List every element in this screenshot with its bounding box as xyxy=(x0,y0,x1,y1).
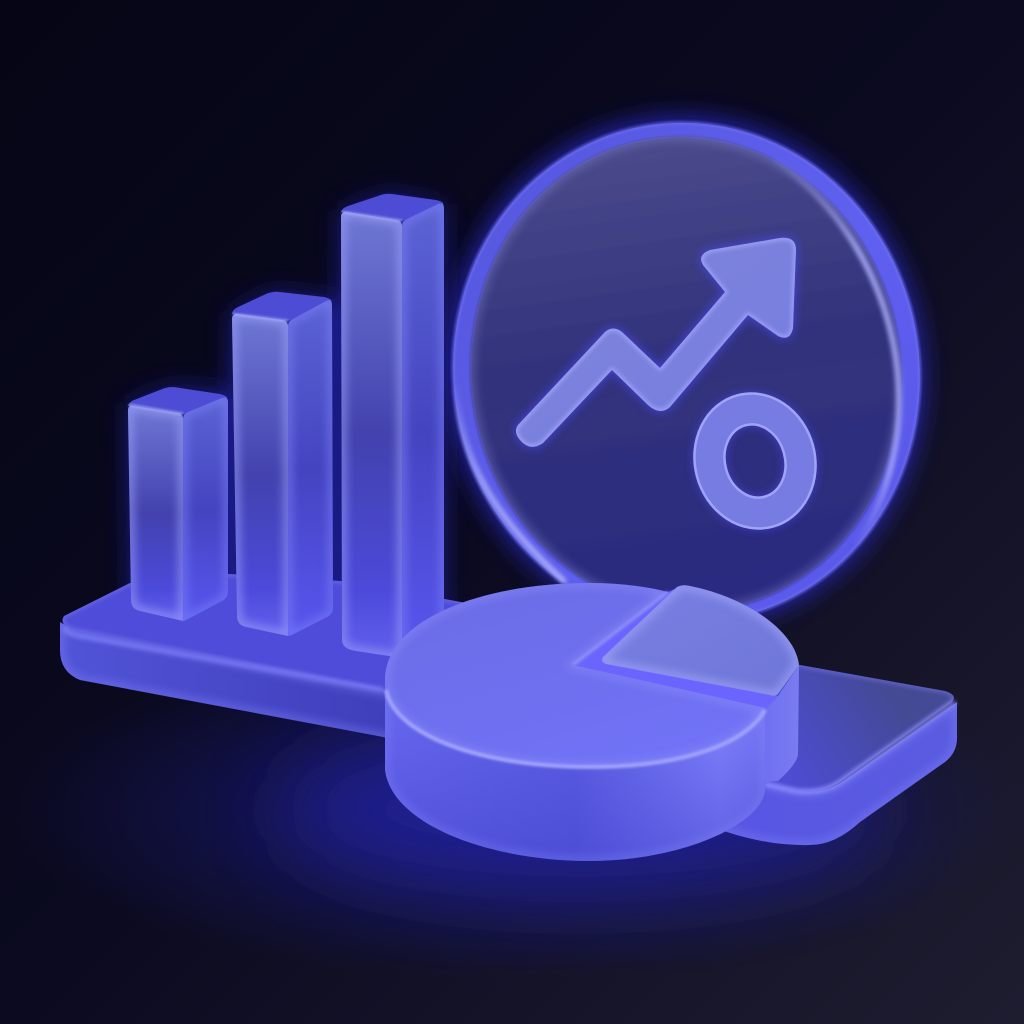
bar 1 xyxy=(128,387,228,621)
pie chart xyxy=(385,583,799,861)
disc face xyxy=(454,134,904,606)
platform side xyxy=(60,622,957,845)
glow behind objects xyxy=(128,85,957,890)
platform base xyxy=(60,574,957,845)
platform top xyxy=(62,574,954,792)
disc rim xyxy=(421,93,952,652)
icon: trend arrow xyxy=(516,238,796,447)
pie main body xyxy=(385,583,765,861)
bar 2 xyxy=(232,292,333,636)
disc with trend icon xyxy=(450,120,923,614)
pie slice xyxy=(573,585,799,782)
icon: ring xyxy=(679,380,831,542)
bar 3 xyxy=(341,194,444,658)
bar chart xyxy=(128,194,444,658)
